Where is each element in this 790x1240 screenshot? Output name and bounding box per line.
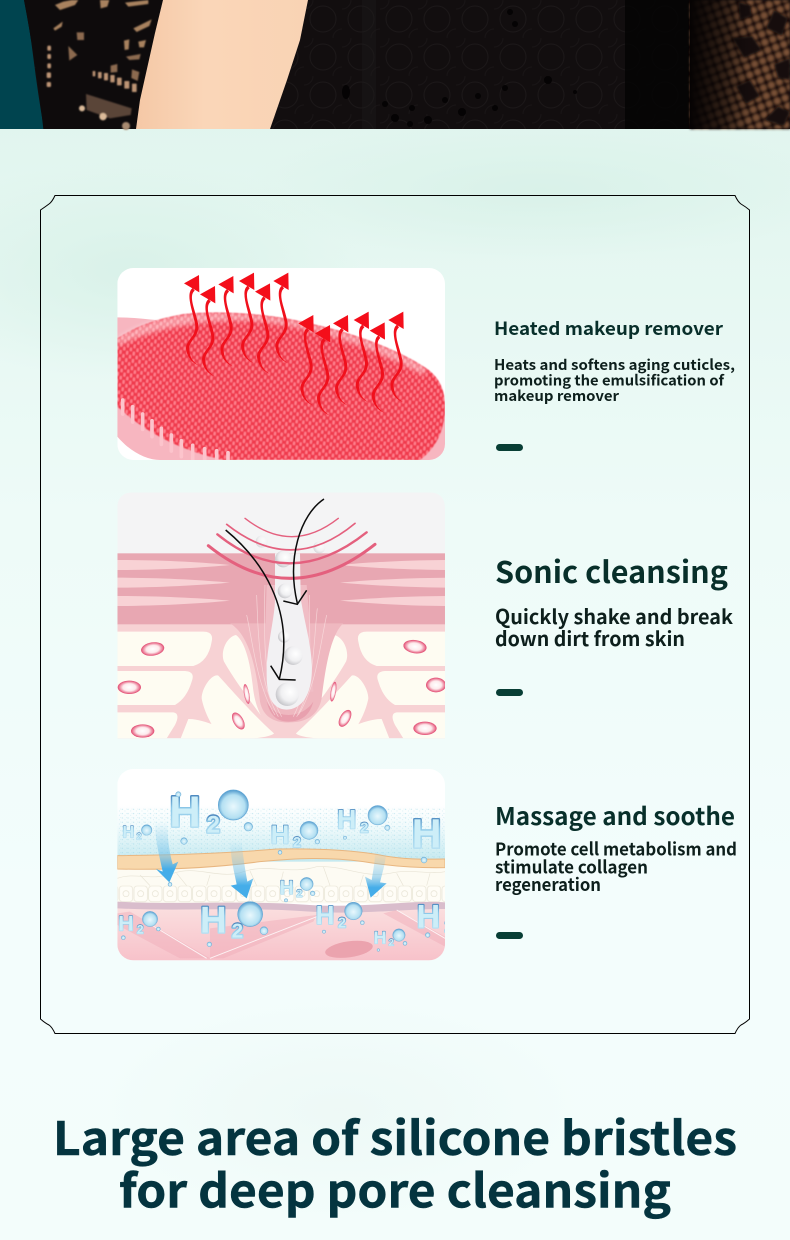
pill marker 1 [496,444,523,451]
water molecules: 2 [447,832,460,858]
text block: sonic description [495,601,733,652]
water molecules: H [118,911,134,936]
title [53,1103,737,1222]
skin cells right [296,560,453,738]
right lace with skin showing [690,0,790,129]
water molecules: 2 [296,888,302,900]
skin arm [136,0,308,129]
text block: massage description: stimulate collagen [495,854,648,880]
title: Large area of silicone bristles [53,1103,737,1169]
text block: sonic description: Quickly shake and break [495,601,733,630]
title: for deep pore cleansing [119,1156,671,1222]
water molecules: H [316,900,334,930]
water molecules: 2 [445,916,455,936]
heading: massage and soothe: Massage and soothe [495,797,735,832]
text block: massage description [495,836,737,897]
text block: heated description: makeup remover [494,385,620,406]
water molecules: H [169,789,201,837]
water molecules: H [122,823,134,841]
water molecules: 2 [232,921,243,943]
water molecules: H [200,899,227,940]
text block: massage description: Promote cell metabolism and [495,836,737,862]
decorative frame with notched corners [40,196,750,1034]
pill marker 3 [496,932,523,939]
text block: heated description: Heats and softens aging cuticles, [494,354,735,375]
small droplets [121,792,430,951]
cell nuclei [118,638,446,738]
text block: massage description: regeneration [495,872,601,897]
dirt pearls [256,536,325,706]
water molecules: H [374,927,386,947]
water molecules: 2 [137,832,142,842]
tan skin band [117,849,445,869]
text block: heated description: promoting the emulsification of [494,370,725,390]
sonic waves [208,518,375,578]
water molecules: H [280,877,294,899]
photo: model arm and black lace dress [0,0,790,130]
skin cells layer [117,862,445,903]
water molecules [118,789,460,949]
pore funnel [230,623,343,722]
lace holes [342,9,577,127]
pill marker 2 [496,689,523,696]
heading: heated makeup remover: Heated makeup remover [494,315,723,341]
panel: massage and soothe image [117,769,460,961]
pore channel [267,553,312,710]
heat arrows [184,273,404,415]
heading: sonic cleansing: Sonic cleansing [495,548,728,592]
blue arrows [155,822,387,898]
water molecules: H [337,805,356,835]
water molecules: H [412,810,442,856]
water molecules: H [417,898,440,934]
water molecules: 2 [137,923,144,937]
pale outer bristles [123,400,228,460]
teal backdrop [0,0,44,129]
left lace pattern [24,0,163,130]
panel: sonic cleansing image [117,492,453,738]
dermis [117,907,445,960]
water molecules: 2 [338,916,346,932]
water molecules: 2 [389,938,394,949]
text block: heated description [494,354,735,406]
water molecules: 2 [293,835,301,851]
panel: heated makeup remover image [117,268,445,460]
water molecules: 2 [360,820,368,836]
text block: sonic description: down dirt from skin [495,623,685,652]
water molecules: 2 [207,812,220,839]
silicone brush back [117,317,445,460]
silicone bristles [117,312,445,460]
water molecules: H [271,819,289,849]
lighter dress panel [362,0,376,129]
dark dress shading at right [625,0,705,129]
skin cells left [117,560,274,738]
black arrows [226,499,324,680]
